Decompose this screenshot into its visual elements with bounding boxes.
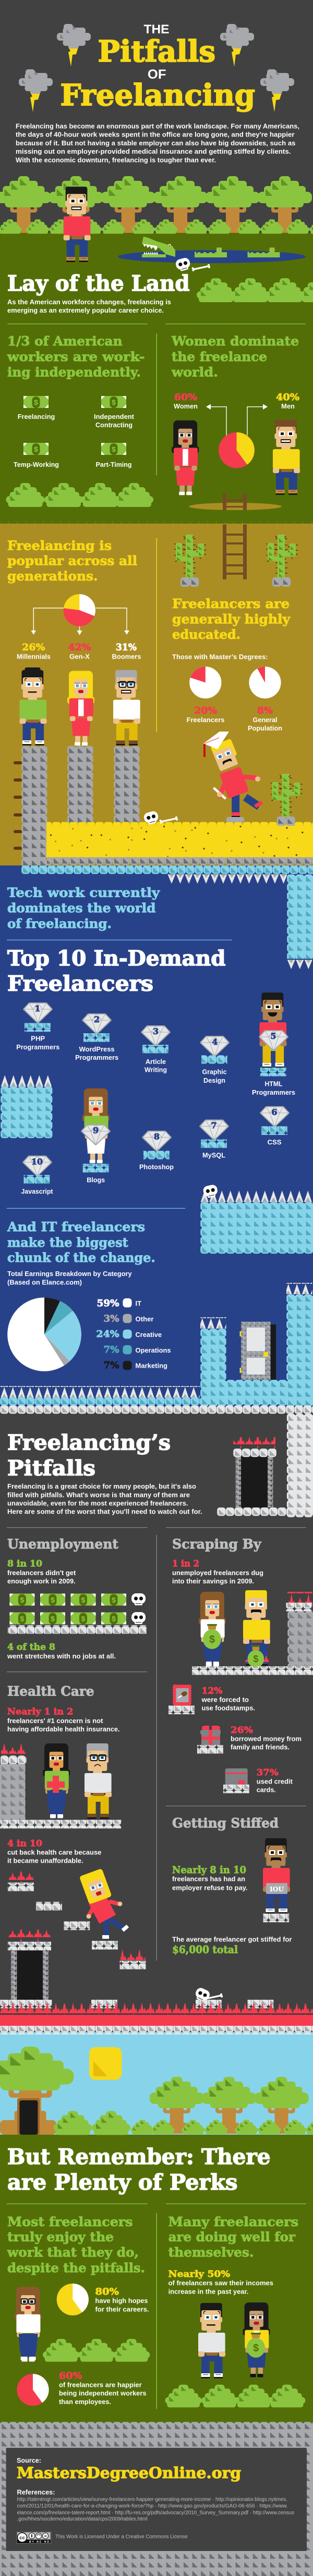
bushes bottom left (6, 483, 153, 507)
heading: 1/3 of American (7, 333, 123, 349)
person: grey haired man (85, 1743, 112, 1819)
stat: freelancers' #1 concern is not (7, 1717, 103, 1725)
foodstamps item: were forced to (201, 1696, 249, 1704)
stat: 8 in 10 (7, 1558, 42, 1569)
pitfalls intro text: Freelancing is a great choice for many people, but it's also (7, 1482, 196, 1490)
person: woman with money bag (199, 1592, 226, 1666)
pitfalls intro text: filled with pitfalls. What's worse is that many of them are (7, 1491, 190, 1499)
chart caption: (Based on Elance.com) (7, 1279, 82, 1286)
creative commons badge: cc (19, 2535, 25, 2541)
stat labels: 42% (68, 642, 91, 653)
sand floor (46, 822, 313, 858)
title: OF (148, 67, 166, 82)
pie chart: 60 percent (17, 2374, 49, 2406)
wall with fire (0, 1744, 27, 1820)
stat: for their careers. (95, 2306, 149, 2313)
person: boomer (113, 670, 140, 746)
intro text (16, 122, 299, 164)
heading (7, 2214, 145, 2275)
heading: but remember: But Remember: There (7, 2144, 270, 2169)
ice block left with spikes (1, 1075, 53, 1138)
icon: part-time money: Part-Timing (96, 461, 132, 468)
stone columns (21, 746, 140, 866)
stat labels: Boomers (112, 652, 141, 661)
stat: of freelancers are happier (59, 2381, 142, 2389)
panel: generations (7, 538, 141, 866)
rank 3 article writing: Writing (145, 1066, 167, 1074)
person: graduate falling (203, 732, 263, 817)
references list: elance.com/p/freelance-talent-report.html · http://fu-res.org/pdfs/advocacy/2010_Survey_Summary.pdf · http://www.census (17, 2510, 294, 2516)
creative commons badge: BY NC ND (29, 2541, 49, 2544)
scalloped green edge (0, 521, 313, 524)
bushes top right (197, 278, 313, 302)
stat labels: 40% (276, 392, 299, 403)
stat: 4 in 10 (7, 1838, 42, 1849)
legend: Operations (136, 1346, 171, 1354)
heading: tech work (7, 885, 160, 931)
person: man grey shirt (198, 2303, 225, 2379)
legend: 24% (96, 1329, 119, 1340)
stat labels: 31% (116, 642, 137, 653)
heading: Most freelancers (7, 2214, 133, 2229)
icon: storm clouds (19, 24, 294, 112)
arrows (206, 404, 268, 436)
icon: contracting money (94, 396, 135, 429)
person: gen-x woman (67, 671, 94, 746)
bushes (43, 2339, 150, 2362)
stat: 80% (95, 2286, 119, 2297)
ice block right with spikes (200, 1191, 313, 1254)
light stone row (0, 2026, 313, 2035)
legend: 7% (103, 1360, 119, 1371)
stat: unemployed freelancers dug (172, 1569, 263, 1577)
pitfalls intro text (7, 1482, 202, 1516)
footer stone background (0, 2422, 313, 2576)
stat labels (174, 392, 299, 410)
intro text: because of it. But not having a stable employer can also have big downsides, such as (16, 139, 295, 147)
rank 3 article writing (141, 1026, 170, 1074)
heading (172, 596, 291, 642)
title: THE (144, 22, 169, 36)
credit cards item: used credit (257, 1777, 293, 1785)
stat: cut back health care because (7, 1848, 101, 1856)
rank 6 css: CSS (267, 1138, 282, 1146)
heading: And IT freelancers (7, 1219, 145, 1234)
heading: Freelancing is (7, 538, 112, 553)
panel: doing well (165, 2214, 305, 2407)
footer panel (6, 2448, 307, 2551)
heading: Scraping By (172, 1537, 262, 1552)
borrowed money gift item: borrowed money from (231, 1735, 302, 1743)
chart caption (7, 1270, 132, 1286)
pie chart: population 8 percent: 8% (257, 705, 273, 716)
big tree house (0, 2047, 74, 2135)
heading: Many freelancers (168, 2214, 298, 2229)
rank 6 css (260, 1107, 289, 1146)
rank 2 wordpress: WordPress (79, 1045, 115, 1053)
stat labels: Women (174, 402, 198, 410)
legend: 3% (103, 1314, 119, 1324)
person: woman with glasses (15, 2287, 42, 2361)
source: Source: (17, 2457, 41, 2464)
borrowed money gift item: 26% (231, 1725, 253, 1736)
stat: into their savings in 2009. (172, 1577, 254, 1585)
heading: but remember: are Plenty of Perks (7, 2170, 237, 2195)
heading: freelancing's pitfalls: Pitfalls (7, 1456, 95, 1481)
stone platforms over lava (0, 2000, 273, 2009)
rank 7 mysql (200, 1120, 228, 1159)
legend: IT (136, 1299, 141, 1307)
heading: truly enjoy the (7, 2230, 114, 2245)
legend: Creative (136, 1331, 162, 1339)
person: man (273, 419, 300, 495)
stat: 1 in 2 (172, 1558, 199, 1569)
pie chart: earnings (7, 1297, 81, 1371)
stat: Nearly 1 in 2 (7, 1707, 73, 1717)
pie chart: population 8 percent: General (252, 716, 278, 724)
stat: having affordable health insurance. (7, 1725, 120, 1733)
stat: Nearly 50% (168, 2269, 230, 2280)
rank 2 wordpress (75, 1014, 118, 1061)
skull and bone over lava (194, 1986, 223, 2003)
stat labels (17, 642, 141, 661)
stat labels: Men (281, 402, 295, 410)
intro text: missing out on employer-provided medical insurance and getting stiffed by clients. (16, 147, 291, 155)
heading: freelancing's pitfalls (7, 1431, 171, 1481)
title: Pitfalls (98, 34, 215, 69)
rank 6 css: 6 (271, 1107, 278, 1117)
stat labels: 26% (22, 642, 45, 653)
section background: blue (0, 865, 313, 1407)
heading: are doing well for (168, 2230, 295, 2245)
panel: women dominate (171, 333, 300, 495)
stat (172, 1864, 247, 1891)
skull on ice (202, 1184, 219, 1198)
fire door bottom (8, 1929, 51, 2000)
references list: .gov/hhes/socdemo/education/data/cps/2009/tables.html (17, 2517, 147, 2522)
stat: enough work in 2009. (7, 1577, 76, 1585)
rank 9 blogs with person: Blogs (87, 1176, 105, 1184)
credit cards item: 37% (257, 1767, 279, 1778)
heading: freelancing's pitfalls: Freelancing’s (7, 1431, 171, 1455)
rank 1 php: Programmers (16, 1043, 59, 1051)
rank 1 php: PHP (31, 1035, 45, 1042)
stat labels: 60% (174, 392, 197, 403)
intro text: the days of 40-hour work weeks spent in the office are long gone, and they're happier (16, 131, 294, 139)
lava (0, 2003, 313, 2026)
rank 10 javascript: 10 (31, 1157, 43, 1167)
icon: contracting money: Contracting (95, 421, 133, 429)
references list: com/2011/12/01/health-care-for-a-changing-work-force/?hp · http://www.gao.gov/products/GAO-06-656 · https://www. (17, 2504, 288, 2509)
ice column top right (287, 874, 313, 959)
rank 2 wordpress: 2 (94, 1014, 100, 1024)
stat: than employees. (59, 2398, 111, 2406)
person: scared man (64, 187, 91, 262)
pie chart: freelancers 20 percent: 20% (194, 705, 217, 716)
heading (168, 2214, 298, 2260)
pie chart: population 8 percent (248, 666, 282, 732)
fire door top (233, 1437, 276, 1507)
person: woman with bag (243, 2302, 270, 2377)
heading: workers are work- (7, 349, 145, 364)
chart caption: Total Earnings Breakdown by Category (7, 1270, 132, 1278)
stone and ice floor rows (21, 857, 313, 874)
stat (7, 1642, 116, 1660)
stones under graduate (226, 817, 244, 822)
panel: educated (172, 596, 291, 732)
spikes under ice column (287, 960, 313, 969)
section background: top dark (0, 0, 313, 233)
heading: Women dominate (171, 333, 299, 349)
rank 2 wordpress: Programmers (75, 1054, 118, 1061)
sun block (89, 2047, 122, 2080)
heading: tech work: dominates the world (7, 900, 156, 915)
panel: enjoy the work (7, 2214, 150, 2406)
person: man with burning money bag (243, 1590, 270, 1668)
icon: temp money: Temp-Working (14, 461, 59, 468)
borrowed money gift item (197, 1725, 302, 1754)
heading (7, 333, 145, 380)
references list: http://talentmgt.com/articles/view/survey-freelancers-happier-generating-more-income · http://opinionator.blogs.nytimes. (17, 2497, 287, 2503)
title (61, 22, 255, 113)
panel: getting stiffed (166, 1806, 306, 1955)
rank 1 php (16, 1003, 59, 1051)
section background: green ground (0, 233, 313, 521)
source name: MastersDegreeOnline.org (17, 2464, 241, 2482)
stat: $6,000 total (172, 1943, 238, 1955)
license text: This Work is Licensed Under a Creative Commons License (55, 2534, 188, 2540)
section background: sky (0, 2032, 313, 2135)
bushes (165, 2385, 305, 2407)
section background: green perks (0, 2135, 313, 2432)
heading: lay of the land: Lay of the Land (7, 271, 190, 296)
heading: tech work: Tech work currently (7, 885, 160, 900)
references list (17, 2497, 294, 2522)
heading: top 10: Top 10 In-Demand (7, 946, 226, 971)
heading: but remember (7, 2144, 270, 2195)
forest scene (0, 176, 313, 234)
pie chart: population 8 percent: Population (248, 724, 282, 732)
pit and ladder top (189, 493, 282, 510)
ice castle walls (0, 1283, 313, 1406)
references heading: References: (17, 2488, 55, 2496)
meadow scene (0, 2047, 313, 2135)
stat: Nearly 8 in 10 (172, 1864, 246, 1876)
hanging spikes (167, 874, 287, 884)
ladder rungs on column (14, 761, 22, 850)
rank 9 blogs with person: 9 (93, 1125, 99, 1135)
rank 7 mysql: MySQL (202, 1151, 225, 1159)
stat labels: Gen-X (69, 652, 90, 661)
rank 4 graphic design: Design (203, 1076, 225, 1084)
rank 4 graphic design: 4 (212, 1037, 218, 1047)
stat (7, 1707, 120, 1733)
person: man with IOU: IOU (270, 1886, 284, 1893)
legend: Marketing (136, 1362, 167, 1370)
rank 5 html with person: HTML (265, 1080, 283, 1088)
foodstamps item: 12% (201, 1686, 222, 1696)
heading (7, 1219, 155, 1265)
pond with alligators (118, 237, 306, 263)
stat: it became unaffordable. (7, 1857, 83, 1865)
icon: temp money (14, 443, 59, 468)
icon: freelancing money: Freelancing (18, 413, 55, 420)
icon: part-time money (96, 443, 132, 468)
light stone row (0, 1405, 313, 1414)
stat (172, 1936, 292, 1955)
stat (172, 1558, 263, 1585)
stepping platforms (8, 1872, 146, 1970)
heading: chunk of the change. (7, 1250, 155, 1265)
heading: popular across all (7, 553, 137, 568)
pitfalls intro text: unavoidable, even for the most experienced freelancers. (7, 1500, 188, 1507)
panel: unemployment (7, 1537, 147, 1660)
stone platform (0, 1820, 121, 1828)
heading: work that they do, (7, 2245, 139, 2260)
person: woman with cross (43, 1743, 70, 1818)
rank 8 photoshop: 8 (154, 1132, 160, 1142)
stat: 4 of the 8 (7, 1642, 55, 1653)
icon: freelancing money (18, 396, 55, 420)
stat (7, 1838, 101, 1865)
rank 10 javascript (21, 1156, 53, 1195)
heading: make the biggest (7, 1235, 128, 1250)
legend: Other (136, 1315, 153, 1323)
heading (7, 538, 137, 584)
intro text: Freelancing has become an enormous part of the work landscape. For many Americans, (16, 122, 299, 130)
legend: 59% (97, 1298, 119, 1309)
pie chart: 80 percent (57, 2284, 89, 2315)
rank 10 javascript: Javascript (21, 1187, 53, 1195)
rank 7 mysql: 7 (211, 1121, 217, 1131)
rank 4 graphic design: Graphic (202, 1068, 226, 1076)
heading: world. (171, 365, 218, 380)
heading: Freelancers are (172, 596, 290, 611)
stat labels: Millennials (17, 652, 51, 661)
rank 8 photoshop: Photoshop (139, 1163, 174, 1171)
icon: cacti (174, 535, 298, 587)
borrowed money gift item: family and friends. (231, 1743, 290, 1751)
pie chart: generations (64, 594, 95, 626)
heading: the freelance (172, 349, 267, 364)
subheading text: emerging as an extremely popular career choice. (7, 306, 164, 314)
stat: freelancers has had an (172, 1875, 245, 1883)
stat: being independent workers (59, 2389, 146, 2397)
heading: generations. (7, 568, 98, 584)
pie chart: gender (219, 432, 255, 468)
stat (7, 1558, 76, 1585)
foodstamps item: use foodstamps. (201, 1704, 255, 1712)
rank 9 blogs with person (81, 1088, 110, 1184)
heading: top 10: Freelancers (7, 971, 153, 996)
heading: top 10 (7, 946, 226, 996)
heading: Unemployment (7, 1537, 118, 1552)
label: Those with Master’s Degrees: (172, 653, 268, 661)
pie chart: freelancers 20 percent: Freelancers (187, 716, 224, 724)
rank 5 html with person (252, 993, 295, 1096)
heading: despite the pitfalls. (7, 2260, 145, 2275)
legend (96, 1298, 171, 1371)
heading: Getting Stiffed (172, 1815, 279, 1830)
person: woman (172, 420, 199, 495)
door in ice castle (240, 1322, 276, 1380)
skull and bone (143, 810, 178, 825)
heading: generally highly (172, 611, 291, 626)
heading: Health Care (7, 1683, 94, 1699)
heading: ing independently. (7, 365, 141, 380)
stat: employer refuse to pay. (172, 1884, 247, 1891)
stat (168, 2269, 273, 2295)
cactus with stones (270, 774, 303, 826)
subheading text: As the American workforce changes, freelancing is (7, 298, 171, 306)
person: falling woman (79, 1868, 129, 1939)
stat: went stretches with no jobs at all. (7, 1652, 116, 1660)
section background: olive desert (0, 521, 313, 865)
panel: scraping by (168, 1537, 313, 1793)
pitfalls intro text: Here are some of the worst that you'll need to watch out for. (7, 1508, 202, 1516)
skull and bone (175, 257, 210, 272)
stone platform (192, 1666, 313, 1675)
heading: educated. (172, 627, 240, 642)
rank 4 graphic design (200, 1036, 229, 1084)
stat (59, 2371, 146, 2406)
subheading text (7, 298, 171, 314)
ladder (223, 524, 247, 579)
person: millennial (20, 667, 47, 746)
panel: IT freelancers (7, 1219, 171, 1371)
pie chart: freelancers 20 percent (187, 666, 224, 724)
icon: contracting money: Independent (94, 413, 135, 420)
person: man with IOU (263, 1838, 290, 1922)
rank 5 html with person: 5 (270, 1031, 276, 1041)
stat: have high hopes (95, 2297, 148, 2305)
rank 8 photoshop (139, 1131, 174, 1171)
stat: freelancers didn't get (7, 1569, 76, 1577)
credit cards item: cards. (257, 1786, 276, 1793)
wall with fire (286, 1592, 313, 1666)
arrows (31, 608, 129, 635)
heading: tech work: of freelancing. (7, 916, 112, 931)
stat: 60% (59, 2371, 82, 2382)
rank 1 php: 1 (34, 1004, 41, 1013)
stat (95, 2286, 149, 2313)
rank 3 article writing: Article (146, 1058, 166, 1066)
stat: of freelancers saw their incomes (168, 2279, 273, 2287)
heading (171, 333, 299, 380)
stat: increase in the past year. (168, 2287, 248, 2295)
rank 3 article writing: 3 (153, 1026, 159, 1036)
creative commons badge (17, 2532, 51, 2544)
title: Freelancing (61, 78, 255, 113)
intro text: With the economic downturn, freelancing is tougher than ever. (16, 156, 216, 164)
light stone column right (287, 1414, 313, 1517)
foodstamps item (168, 1685, 255, 1714)
legend: 7% (103, 1344, 119, 1355)
section background: dark pitfalls (0, 1407, 313, 2033)
money and skulls (8, 1593, 147, 1634)
panel: health care (0, 1683, 313, 2576)
rank 5 html with person: Programmers (252, 1088, 295, 1096)
panel: one third of workers (7, 333, 145, 468)
light stone floor right (217, 1507, 313, 1516)
heading: themselves. (168, 2245, 254, 2260)
stat: The average freelancer got stiffed for (172, 1936, 292, 1943)
credit cards item (223, 1767, 293, 1793)
